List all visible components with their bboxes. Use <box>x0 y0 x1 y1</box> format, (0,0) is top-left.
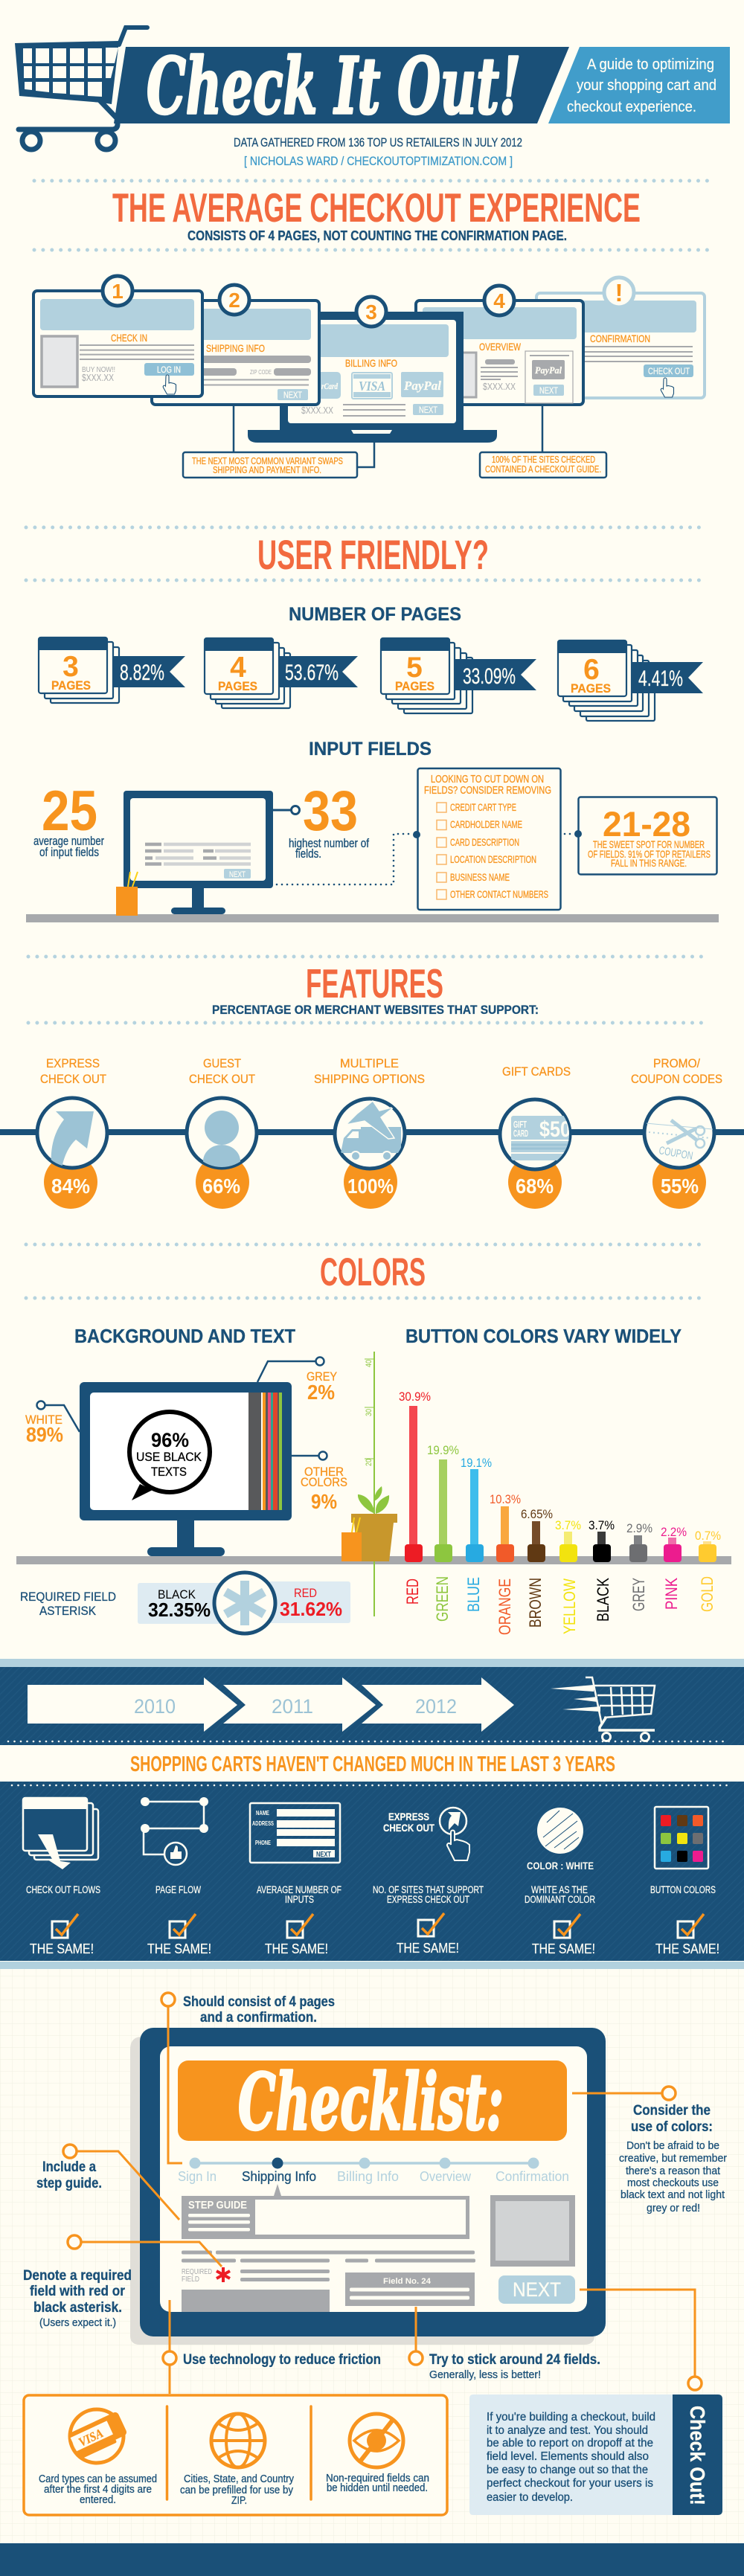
tip: use of colors: use of colors: <box>631 2119 713 2135</box>
screen: laptop billing info: BILLING INFO <box>345 357 397 369</box>
page stack: 3 pages <box>38 637 185 703</box>
screen: check in: CHECK IN <box>111 332 147 344</box>
page stack: 4 pages <box>204 637 358 708</box>
label: other colors <box>292 1452 347 1513</box>
item: page flow <box>141 1797 211 1956</box>
tip: location prefill: Cities, State, and Country <box>184 2473 294 2485</box>
bar: orange: 10.3% <box>490 1493 521 1506</box>
bar: grey: GREY <box>629 1578 648 1611</box>
bar: black: BLACK <box>594 1578 612 1622</box>
screen: shipping info: NEXT <box>283 390 303 400</box>
panel: sweet spot: 21-28 <box>603 804 690 844</box>
label: white <box>25 1401 80 1446</box>
tip: hidden fields: Non-required fields can <box>326 2472 429 2485</box>
subtitle box <box>548 47 730 123</box>
item: express check out: NO. OF SITES THAT SUPPORT <box>373 1884 484 1895</box>
subtitle box: your shopping cart and <box>577 77 716 94</box>
plant pot and cup <box>341 1486 397 1561</box>
screen: confirmation <box>536 277 705 398</box>
label: other colors: 9% <box>311 1490 337 1513</box>
tip: card types: after the first 4 digits are <box>44 2483 152 2496</box>
screen: overview: 4 <box>493 289 505 312</box>
item: average number of inputs <box>250 1803 341 1956</box>
speech bubble: USE BLACK <box>136 1450 202 1464</box>
item: average number of inputs: ADDRESS <box>252 1819 274 1827</box>
feature: gift cards: GIFT <box>513 1119 527 1130</box>
bar: yellow: 3.7% <box>555 1519 581 1532</box>
axis <box>365 1352 374 1616</box>
screen: shipping info: SHIPPING INFO <box>206 342 265 354</box>
bar: blue <box>461 1456 492 1612</box>
feature: multiple shipping options <box>314 1056 425 1209</box>
bar: gold: GOLD <box>698 1576 716 1612</box>
arrow: 2011 <box>223 1677 376 1732</box>
axis: 30 <box>365 1409 373 1416</box>
bar: blue: 19.1% <box>461 1456 492 1470</box>
feature: gift cards: $50 <box>539 1117 571 1142</box>
screen: laptop billing info: $XXX.XX <box>301 405 333 416</box>
feature: promo and coupon codes: COUPON CODES <box>631 1072 722 1086</box>
footer band <box>0 2543 744 2576</box>
step guide progress <box>178 2157 569 2184</box>
stat: highest fields: highest number of <box>289 837 369 850</box>
stat: average fields: of input fields <box>39 846 99 859</box>
page stack: 5 pages <box>380 637 536 713</box>
label: grey: 2% <box>307 1381 335 1404</box>
screen: check in <box>33 276 202 396</box>
form fields: REQUIRED <box>182 2267 212 2276</box>
screen: laptop billing info: VISA <box>359 379 385 394</box>
icon: shopping cart <box>15 28 147 150</box>
stat: highest fields: fields. <box>295 847 321 861</box>
feature: promo and coupon codes: 55% <box>661 1175 699 1198</box>
item: white dominant color: DOMINANT COLOR <box>525 1894 595 1905</box>
form fields <box>182 2251 475 2312</box>
tip: use of colors: creative, but remember <box>619 2152 727 2165</box>
required field asterisk: RED <box>294 1586 317 1600</box>
tip: use of colors: Don't be afraid to be <box>626 2139 719 2152</box>
screen: overview: NEXT <box>539 385 559 396</box>
heading: input fields: INPUT FIELDS <box>309 739 432 759</box>
bar: black <box>589 1519 615 1622</box>
page stack: 6 pages <box>557 640 703 721</box>
tip: use of colors <box>572 2087 727 2214</box>
next button: NEXT <box>513 2278 561 2301</box>
tip: step guide: step guide. <box>36 2176 102 2191</box>
arrow: 2011: 2011 <box>272 1695 313 1718</box>
tip: step guide <box>36 2145 179 2220</box>
tip: use of colors: there's a reason that <box>626 2165 721 2177</box>
title banner: Check It Out! <box>147 40 521 132</box>
bar: grey <box>626 1522 652 1611</box>
bar: pink: 2.2% <box>661 1526 687 1539</box>
tip: four pages <box>161 1993 335 2163</box>
page stack: 5 pages: 33.09% <box>463 664 516 689</box>
tip: required field <box>23 2235 222 2329</box>
bar: grey: 2.9% <box>626 1522 652 1535</box>
bar: gold <box>695 1529 721 1612</box>
page stack: 5 pages: PAGES <box>395 679 434 693</box>
tip: 24 fields: Generally, less is better! <box>429 2368 541 2381</box>
item: express check out: EXPRESS <box>388 1811 429 1822</box>
tip: use of colors: most checkouts use <box>627 2177 719 2189</box>
bar: pink: PINK <box>662 1578 681 1610</box>
item: check out flows <box>22 1797 100 1956</box>
panel: check out tab: perfect checkout for your users is <box>487 2477 653 2490</box>
panel: fields to remove: LOOKING TO CUT DOWN ON <box>431 774 544 786</box>
page stack: 3 pages: 8.82% <box>120 661 164 685</box>
required field asterisk: BLACK <box>158 1587 196 1602</box>
bar: blue: BLUE <box>464 1577 483 1612</box>
feature: guest check out: GUEST <box>203 1056 241 1070</box>
tip: hidden fields <box>326 2414 429 2494</box>
bar: pink <box>661 1526 687 1610</box>
screen: shipping info <box>152 285 319 405</box>
subtitle box: checkout experience. <box>567 99 696 115</box>
panel: sweet spot <box>565 797 717 875</box>
step guide progress: Sign In <box>178 2169 217 2184</box>
tip: required field: Denote a required <box>23 2268 132 2284</box>
label: white: WHITE <box>25 1413 62 1427</box>
icon: monitor with form: NEXT <box>229 870 246 879</box>
feature: multiple shipping options: 100% <box>347 1175 394 1198</box>
page stack: 6 pages: 6 <box>583 654 600 686</box>
panel: check out tab: field level. Elements should also <box>487 2450 649 2463</box>
heading: colors: COLORS <box>320 1250 426 1294</box>
screen: check in: BUY NOW!! <box>82 366 115 374</box>
page stack: 3 pages: 3 <box>62 651 79 683</box>
item: express check out: THE SAME! <box>397 1941 459 1956</box>
tip: use of colors: grey or red! <box>647 2202 700 2214</box>
stat: highest fields <box>273 780 369 861</box>
panel: check out tab: be able to report on dropoff at the <box>487 2437 653 2450</box>
chart: button colors <box>341 1352 721 1635</box>
panel: fields to remove: CARD DESCRIPTION <box>450 837 519 848</box>
panel: sweet spot: FALL IN THIS RANGE. <box>611 857 687 869</box>
callout: variant swaps: SHIPPING AND PAYMENT INFO. <box>213 465 321 475</box>
feature: multiple shipping options: MULTIPLE <box>340 1056 399 1070</box>
heading: background and text: BACKGROUND AND TEXT <box>74 1325 295 1347</box>
page stack: 4 pages: 4 <box>230 652 246 684</box>
panel: check out tab: Check Out! <box>686 2406 709 2505</box>
item: average number of inputs: PHONE <box>255 1839 271 1846</box>
callout: variant swaps <box>183 452 357 478</box>
bar: red: 30.9% <box>399 1390 431 1404</box>
tip: 24 fields <box>409 2307 600 2381</box>
item: average number of inputs: AVERAGE NUMBER OF <box>257 1884 341 1895</box>
item: button colors <box>650 1807 719 1956</box>
feature: express check out: CHECK OUT <box>40 1072 106 1086</box>
tip: reduce friction: Use technology to reduce friction <box>183 2352 381 2368</box>
axis: 40 <box>365 1360 373 1367</box>
panel: unchanged elements <box>0 1782 744 1969</box>
label: grey <box>257 1357 337 1404</box>
callout: checkout guide: 100% OF THE SITES CHECKED <box>492 455 595 465</box>
bar: gold: 0.7% <box>695 1529 721 1543</box>
speech bubble <box>129 1412 210 1500</box>
tip: four pages: and a confirmation. <box>200 2010 317 2026</box>
screen: confirmation: CONFIRMATION <box>590 333 650 344</box>
screen: laptop billing info: rCard <box>321 381 339 391</box>
field 24 panel: Field No. 24 <box>383 2277 432 2286</box>
header <box>15 28 730 168</box>
axis: 20 <box>365 1459 373 1466</box>
feature: guest check out <box>187 1056 257 1209</box>
arrow: 2012 <box>362 1677 514 1732</box>
item: express check out: EXPRESS CHECK OUT <box>387 1894 469 1905</box>
tip: reduce friction <box>163 2300 381 2394</box>
feature: promo and coupon codes: PROMO/ <box>653 1056 700 1070</box>
panel: check out tab: be easy to change out so that the <box>487 2464 648 2476</box>
screen: laptop billing info <box>248 297 497 443</box>
tip: step guide: Include a <box>42 2159 96 2175</box>
panel: check out tab: it to analyze and test. You should <box>487 2424 648 2437</box>
item: check out flows: CHECK OUT FLOWS <box>26 1884 100 1895</box>
subtitle box: A guide to optimizing <box>587 57 714 73</box>
bar: brown: BROWN <box>526 1578 545 1628</box>
label: other colors: OTHER <box>304 1465 344 1479</box>
panel: fields to remove <box>413 768 561 910</box>
arrow: 2010: 2010 <box>134 1695 176 1718</box>
stat: average fields: average number <box>33 835 104 848</box>
tip: card types: Card types can be assumed <box>39 2473 157 2485</box>
monitor: background and text <box>80 1382 292 1556</box>
tip: use of colors: black text and not light <box>620 2188 725 2201</box>
screen: confirmation: CHECK OUT <box>648 366 690 376</box>
step guide box: STEP GUIDE <box>188 2199 247 2212</box>
screen: overview <box>416 286 583 405</box>
diagram: checkout pages <box>33 276 705 478</box>
icon: pencil cup <box>116 872 138 916</box>
item: button colors: THE SAME! <box>655 1941 719 1956</box>
shelf <box>26 914 719 922</box>
screen: laptop billing info: NEXT <box>419 405 438 415</box>
tip: next connector <box>580 2290 702 2390</box>
banner: checklist <box>178 2056 567 2148</box>
panel: check out tab <box>469 2394 722 2515</box>
screen: overview: $XXX.XX <box>483 381 516 392</box>
bar: yellow <box>555 1519 581 1634</box>
label: white: 89% <box>26 1423 63 1446</box>
feature: express check out: EXPRESS <box>46 1056 100 1070</box>
step guide progress: Confirmation <box>496 2169 569 2184</box>
subheading: features: PERCENTAGE OR MERCHANT WEBSITES THAT SUPPORT: <box>212 1003 539 1017</box>
item: button colors: BUTTON COLORS <box>650 1884 716 1895</box>
tip: location prefill: ZIP. <box>231 2494 247 2507</box>
arrow: 2012: 2012 <box>415 1695 457 1718</box>
speech bubble: 96% <box>151 1429 189 1451</box>
heading: button colors: BUTTON COLORS VARY WIDELY <box>405 1325 682 1347</box>
tip: location prefill <box>180 2414 294 2507</box>
feature: gift cards: GIFT CARDS <box>502 1064 571 1079</box>
heading: user friendly: USER FRIENDLY? <box>257 531 489 578</box>
step guide progress: Billing Info <box>337 2169 399 2184</box>
feature: express check out <box>37 1056 107 1209</box>
bar: green: GREEN <box>433 1576 452 1622</box>
panel: check out tab: If you're building a checkout, build <box>487 2411 655 2424</box>
screen: check in: $XXX.XX <box>82 372 114 383</box>
panel: fields to remove: CREDIT CART TYPE <box>450 802 516 813</box>
bar: orange: ORANGE <box>496 1578 514 1635</box>
connector lines <box>234 406 542 467</box>
item: express check out <box>373 1808 484 1956</box>
heading: features: FEATURES <box>306 960 443 1006</box>
dotted connector <box>277 834 414 884</box>
checklist tablet <box>130 2028 606 2345</box>
text colour stripes <box>248 1393 282 1510</box>
item: white dominant color: THE SAME! <box>532 1941 595 1956</box>
panel: fields to remove: LOCATION DESCRIPTION <box>450 854 536 865</box>
tip: required field: (Users expect it.) <box>39 2316 116 2329</box>
feature: express check out: 84% <box>51 1175 90 1198</box>
bar: red <box>399 1390 431 1605</box>
item: page flow: THE SAME! <box>147 1941 211 1956</box>
label: grey: GREY <box>307 1369 337 1384</box>
callout: variant swaps: THE NEXT MOST COMMON VARIANT SWAPS <box>192 456 343 466</box>
feature: guest check out: CHECK OUT <box>189 1072 255 1086</box>
item: average number of inputs: NEXT <box>316 1851 331 1859</box>
subheading: CONSISTS OF 4 PAGES, NOT COUNTING THE CONFIRMATION PAGE. <box>187 228 567 243</box>
page stack: 6 pages: PAGES <box>571 681 611 696</box>
item: average number of inputs: THE SAME! <box>265 1941 328 1956</box>
speech bubble: TEXTS <box>151 1465 187 1479</box>
bar: orange <box>490 1493 521 1635</box>
item: check out flows: THE SAME! <box>30 1941 94 1956</box>
banner: checklist: Checklist: <box>238 2056 504 2148</box>
page stack: 4 pages: PAGES <box>218 679 257 693</box>
tip: hidden fields: be hidden until needed. <box>327 2482 428 2494</box>
tip: card types <box>39 2409 157 2506</box>
panel: fields to remove: BUSINESS NAME <box>450 872 510 883</box>
tip: four pages: Should consist of 4 pages <box>183 1994 335 2010</box>
shelf <box>16 1556 731 1564</box>
timeline bar <box>0 1129 744 1135</box>
image placeholder <box>490 2195 575 2267</box>
tip: use of colors: Consider the <box>633 2103 711 2119</box>
field 24 panel <box>345 2273 475 2306</box>
form fields: FIELD <box>182 2275 199 2284</box>
item: white dominant color: COLOR : WHITE <box>527 1860 594 1872</box>
author credit: [ NICHOLAS WARD / CHECKOUTOPTIMIZATION.COM ] <box>244 155 513 168</box>
tip: required field: black asterisk. <box>33 2300 122 2316</box>
bar: brown: 6.65% <box>521 1508 553 1521</box>
panel: check out tab: easier to develop. <box>487 2491 573 2504</box>
screen: laptop billing info: PayPal <box>403 379 441 393</box>
screen: laptop billing info: 3 <box>365 301 377 324</box>
callout: checkout guide <box>480 452 606 478</box>
feature: multiple shipping options: SHIPPING OPTIONS <box>314 1072 425 1086</box>
data source: DATA GATHERED FROM 136 TOP US RETAILERS IN JULY 2012 <box>234 136 522 150</box>
bar: black: 3.7% <box>589 1519 615 1532</box>
screen: check in: 1 <box>112 280 124 303</box>
page stack: 6 pages: 4.41% <box>638 667 683 691</box>
label: other colors: COLORS <box>301 1475 347 1489</box>
panel: timeline <box>0 1659 744 1745</box>
bar: yellow: YELLOW <box>560 1578 579 1634</box>
tip: location prefill: can be prefilled for use by <box>180 2484 293 2496</box>
callout: checkout guide: CONTAINED A CHECKOUT GUIDE. <box>485 464 601 475</box>
feature: promo and coupon codes <box>631 1056 722 1209</box>
tip: required field: field with red or <box>30 2284 126 2299</box>
feature: gift cards <box>500 1064 574 1209</box>
stat: average fields: 25 <box>42 780 97 843</box>
bar: green <box>427 1444 459 1622</box>
step guide progress: Shipping Info <box>242 2169 316 2184</box>
item: page flow: PAGE FLOW <box>155 1884 201 1895</box>
step guide box <box>182 2184 469 2239</box>
screen: shipping info: ZIP CODE <box>250 369 272 376</box>
feature: gift cards: 68% <box>516 1175 554 1198</box>
icon: speeding cart <box>551 1677 655 1741</box>
next button <box>498 2275 575 2304</box>
panel: fields to remove: CARDHOLDER NAME <box>450 819 522 830</box>
screen: shipping info: 2 <box>228 289 240 312</box>
screen: overview: OVERVIEW <box>479 341 522 353</box>
item: average number of inputs: INPUTS <box>285 1894 314 1905</box>
item: white dominant color: WHITE AS THE <box>531 1884 588 1895</box>
tip: 24 fields: Try to stick around 24 fields. <box>429 2352 600 2368</box>
feature: guest check out: 66% <box>202 1175 240 1198</box>
feature: gift cards: CARD <box>513 1128 528 1139</box>
screen: overview: PayPal <box>535 364 562 376</box>
required field asterisk: 32.35% <box>148 1599 211 1621</box>
item: white dominant color <box>525 1808 595 1956</box>
required field asterisk <box>20 1573 350 1634</box>
tip: card types: VISA <box>77 2426 106 2450</box>
stat: highest fields: 33 <box>303 780 358 843</box>
bar: red: RED <box>403 1578 422 1605</box>
item: average number of inputs: NAME <box>256 1809 269 1817</box>
required field asterisk: ASTERISK <box>39 1604 97 1618</box>
panel: fields to remove: FIELDS? CONSIDER REMOVING <box>424 785 551 797</box>
item: express check out: CHECK OUT <box>383 1822 434 1834</box>
page stack: 3 pages: PAGES <box>51 678 91 693</box>
step guide progress: Overview <box>420 2169 472 2184</box>
screen: check in: LOG IN <box>157 364 181 375</box>
bar: brown <box>521 1508 553 1628</box>
panel: technology tips <box>24 2395 447 2515</box>
panel: fields to remove: OTHER CONTACT NUMBERS <box>450 889 548 900</box>
feature: promo and coupon codes: COUPON <box>658 1144 694 1163</box>
bar: green: 19.9% <box>427 1444 459 1457</box>
page stack: 4 pages: 53.67% <box>285 661 339 685</box>
screen: confirmation: ! <box>615 279 623 306</box>
required field asterisk: REQUIRED FIELD <box>20 1590 116 1604</box>
arrow: 2010 <box>28 1677 237 1732</box>
tip: card types: entered. <box>80 2493 116 2506</box>
required field asterisk: 31.62% <box>280 1598 342 1620</box>
title banner <box>114 40 569 132</box>
heading: number of pages: NUMBER OF PAGES <box>289 604 461 625</box>
icon: monitor with form <box>124 791 273 914</box>
page stack: 5 pages: 5 <box>406 652 423 684</box>
